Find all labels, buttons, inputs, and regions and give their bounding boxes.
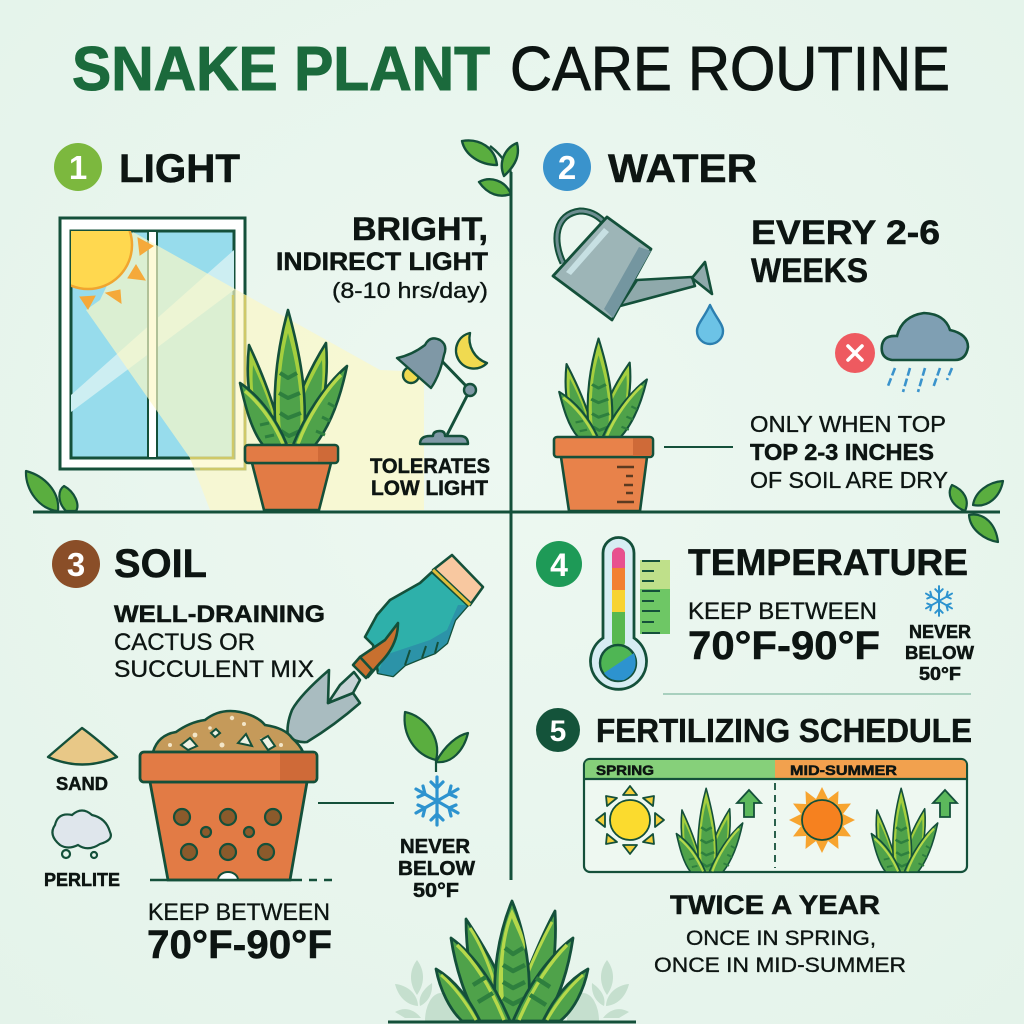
icon: thermometer <box>590 538 670 689</box>
title: SNAKE PLANT <box>72 35 490 104</box>
text: never below: BELOW <box>398 858 475 880</box>
window frame <box>60 218 245 469</box>
text: keep between: 70°F-90°F <box>147 923 332 967</box>
icon: spring plant <box>676 788 743 872</box>
text: tolerates low light: TOLERATES <box>370 455 490 478</box>
potted snake plant <box>240 310 347 510</box>
title: CARE ROUTINE <box>510 35 950 104</box>
step badge 2 <box>543 143 591 191</box>
text: bright indirect light: BRIGHT, <box>352 211 488 247</box>
icon: small snowflake <box>926 586 952 616</box>
text: never below: NEVER <box>400 836 471 858</box>
text: never below: 50°F <box>413 880 459 902</box>
heading: soil: SOIL <box>114 542 207 586</box>
text: only when dry <box>750 411 948 493</box>
label: mid-summer: MID-SUMMER <box>790 762 897 778</box>
step badge 2: 2 <box>558 149 576 186</box>
text: keep between: 70°F-90°F <box>688 624 880 668</box>
text: soil mix: WELL-DRAINING <box>114 601 325 628</box>
icon: no rain <box>835 313 968 392</box>
panel: soil <box>44 540 483 967</box>
heading: water: WATER <box>608 147 757 191</box>
panel: fertilizing schedule <box>536 708 972 977</box>
icon: corner leaves <box>26 471 77 511</box>
icon: sprout <box>405 712 468 772</box>
panel: light <box>26 143 490 511</box>
bottom snake plant <box>388 901 636 1022</box>
text: twice a year: TWICE A YEAR <box>670 890 880 920</box>
light beam <box>86 232 424 510</box>
text: bright indirect light: INDIRECT LIGHT <box>276 248 488 276</box>
text: soil mix <box>114 601 325 683</box>
text: twice a year: ONCE IN MID-SUMMER <box>654 954 906 977</box>
text: keep between <box>147 899 332 967</box>
text: bright indirect light <box>276 211 488 303</box>
icon: summer plant <box>871 788 938 872</box>
text: every 2-6 weeks <box>751 214 940 290</box>
text: bright indirect light: (8-10 hrs/day) <box>332 278 488 303</box>
icon: trowel and glove <box>288 555 483 742</box>
schedule table <box>584 759 967 872</box>
icon: snowflake <box>416 777 458 825</box>
step badge 1 <box>54 143 102 191</box>
step badge 5 <box>536 708 580 752</box>
text: soil mix: SUCCULENT MIX <box>114 656 314 683</box>
step badge 1: 1 <box>69 149 87 186</box>
step badge 5: 5 <box>550 715 566 748</box>
window edge in beam <box>190 295 245 469</box>
text: only when dry: ONLY WHEN TOP <box>750 411 946 437</box>
icon: summer sun <box>789 787 855 853</box>
icon: top centre sprig <box>462 140 518 196</box>
icon: right edge leaves <box>950 481 1003 542</box>
step badge 4 <box>536 541 582 587</box>
text: soil mix: CACTUS OR <box>114 629 255 656</box>
text: never below: NEVER <box>909 622 971 642</box>
title <box>72 35 950 104</box>
text: keep between <box>688 598 880 668</box>
text: keep between: KEEP BETWEEN <box>688 598 877 625</box>
label: sand: SAND <box>56 774 108 794</box>
text: never below <box>905 622 974 684</box>
icon: growth arrow <box>737 790 761 817</box>
icon: perlite <box>52 810 111 858</box>
text: never below <box>398 836 475 902</box>
potted plant with level marks <box>554 338 733 511</box>
text: only when dry: TOP 2-3 INCHES <box>750 439 934 465</box>
step badge 4: 4 <box>550 547 568 583</box>
text: never below: 50°F <box>919 664 961 684</box>
icon: potting mix pot <box>140 711 394 880</box>
step badge 3 <box>52 540 100 588</box>
icon: spring sun <box>596 786 664 854</box>
heading: light: LIGHT <box>119 147 240 191</box>
step badge 3: 3 <box>67 546 85 583</box>
label: perlite: PERLITE <box>44 870 120 890</box>
icon: sun with rays <box>71 231 154 310</box>
quadrant dividers <box>33 172 1000 880</box>
text: tolerates low light <box>370 455 490 500</box>
label: spring: SPRING <box>596 762 654 778</box>
heading: temperature: TEMPERATURE <box>688 542 968 583</box>
icon: sand pile <box>48 728 117 764</box>
text: keep between: KEEP BETWEEN <box>148 899 330 926</box>
panel: water <box>543 143 1003 542</box>
heading: fertilizing schedule: FERTILIZING SCHEDULE <box>596 712 972 749</box>
icon: desk lamp and moon <box>397 333 487 444</box>
text: twice a year: ONCE IN SPRING, <box>686 927 876 950</box>
text: twice a year <box>654 890 906 977</box>
text: tolerates low light: LOW LIGHT <box>371 477 488 500</box>
text: never below: BELOW <box>905 643 974 663</box>
icon: watering can <box>553 211 723 344</box>
panel: temperature <box>536 538 974 694</box>
text: every 2-6 weeks: WEEKS <box>751 252 868 290</box>
text: only when dry: OF SOIL ARE DRY <box>750 467 948 493</box>
icon: growth arrow <box>933 790 957 817</box>
text: every 2-6 weeks: EVERY 2-6 <box>751 214 940 252</box>
